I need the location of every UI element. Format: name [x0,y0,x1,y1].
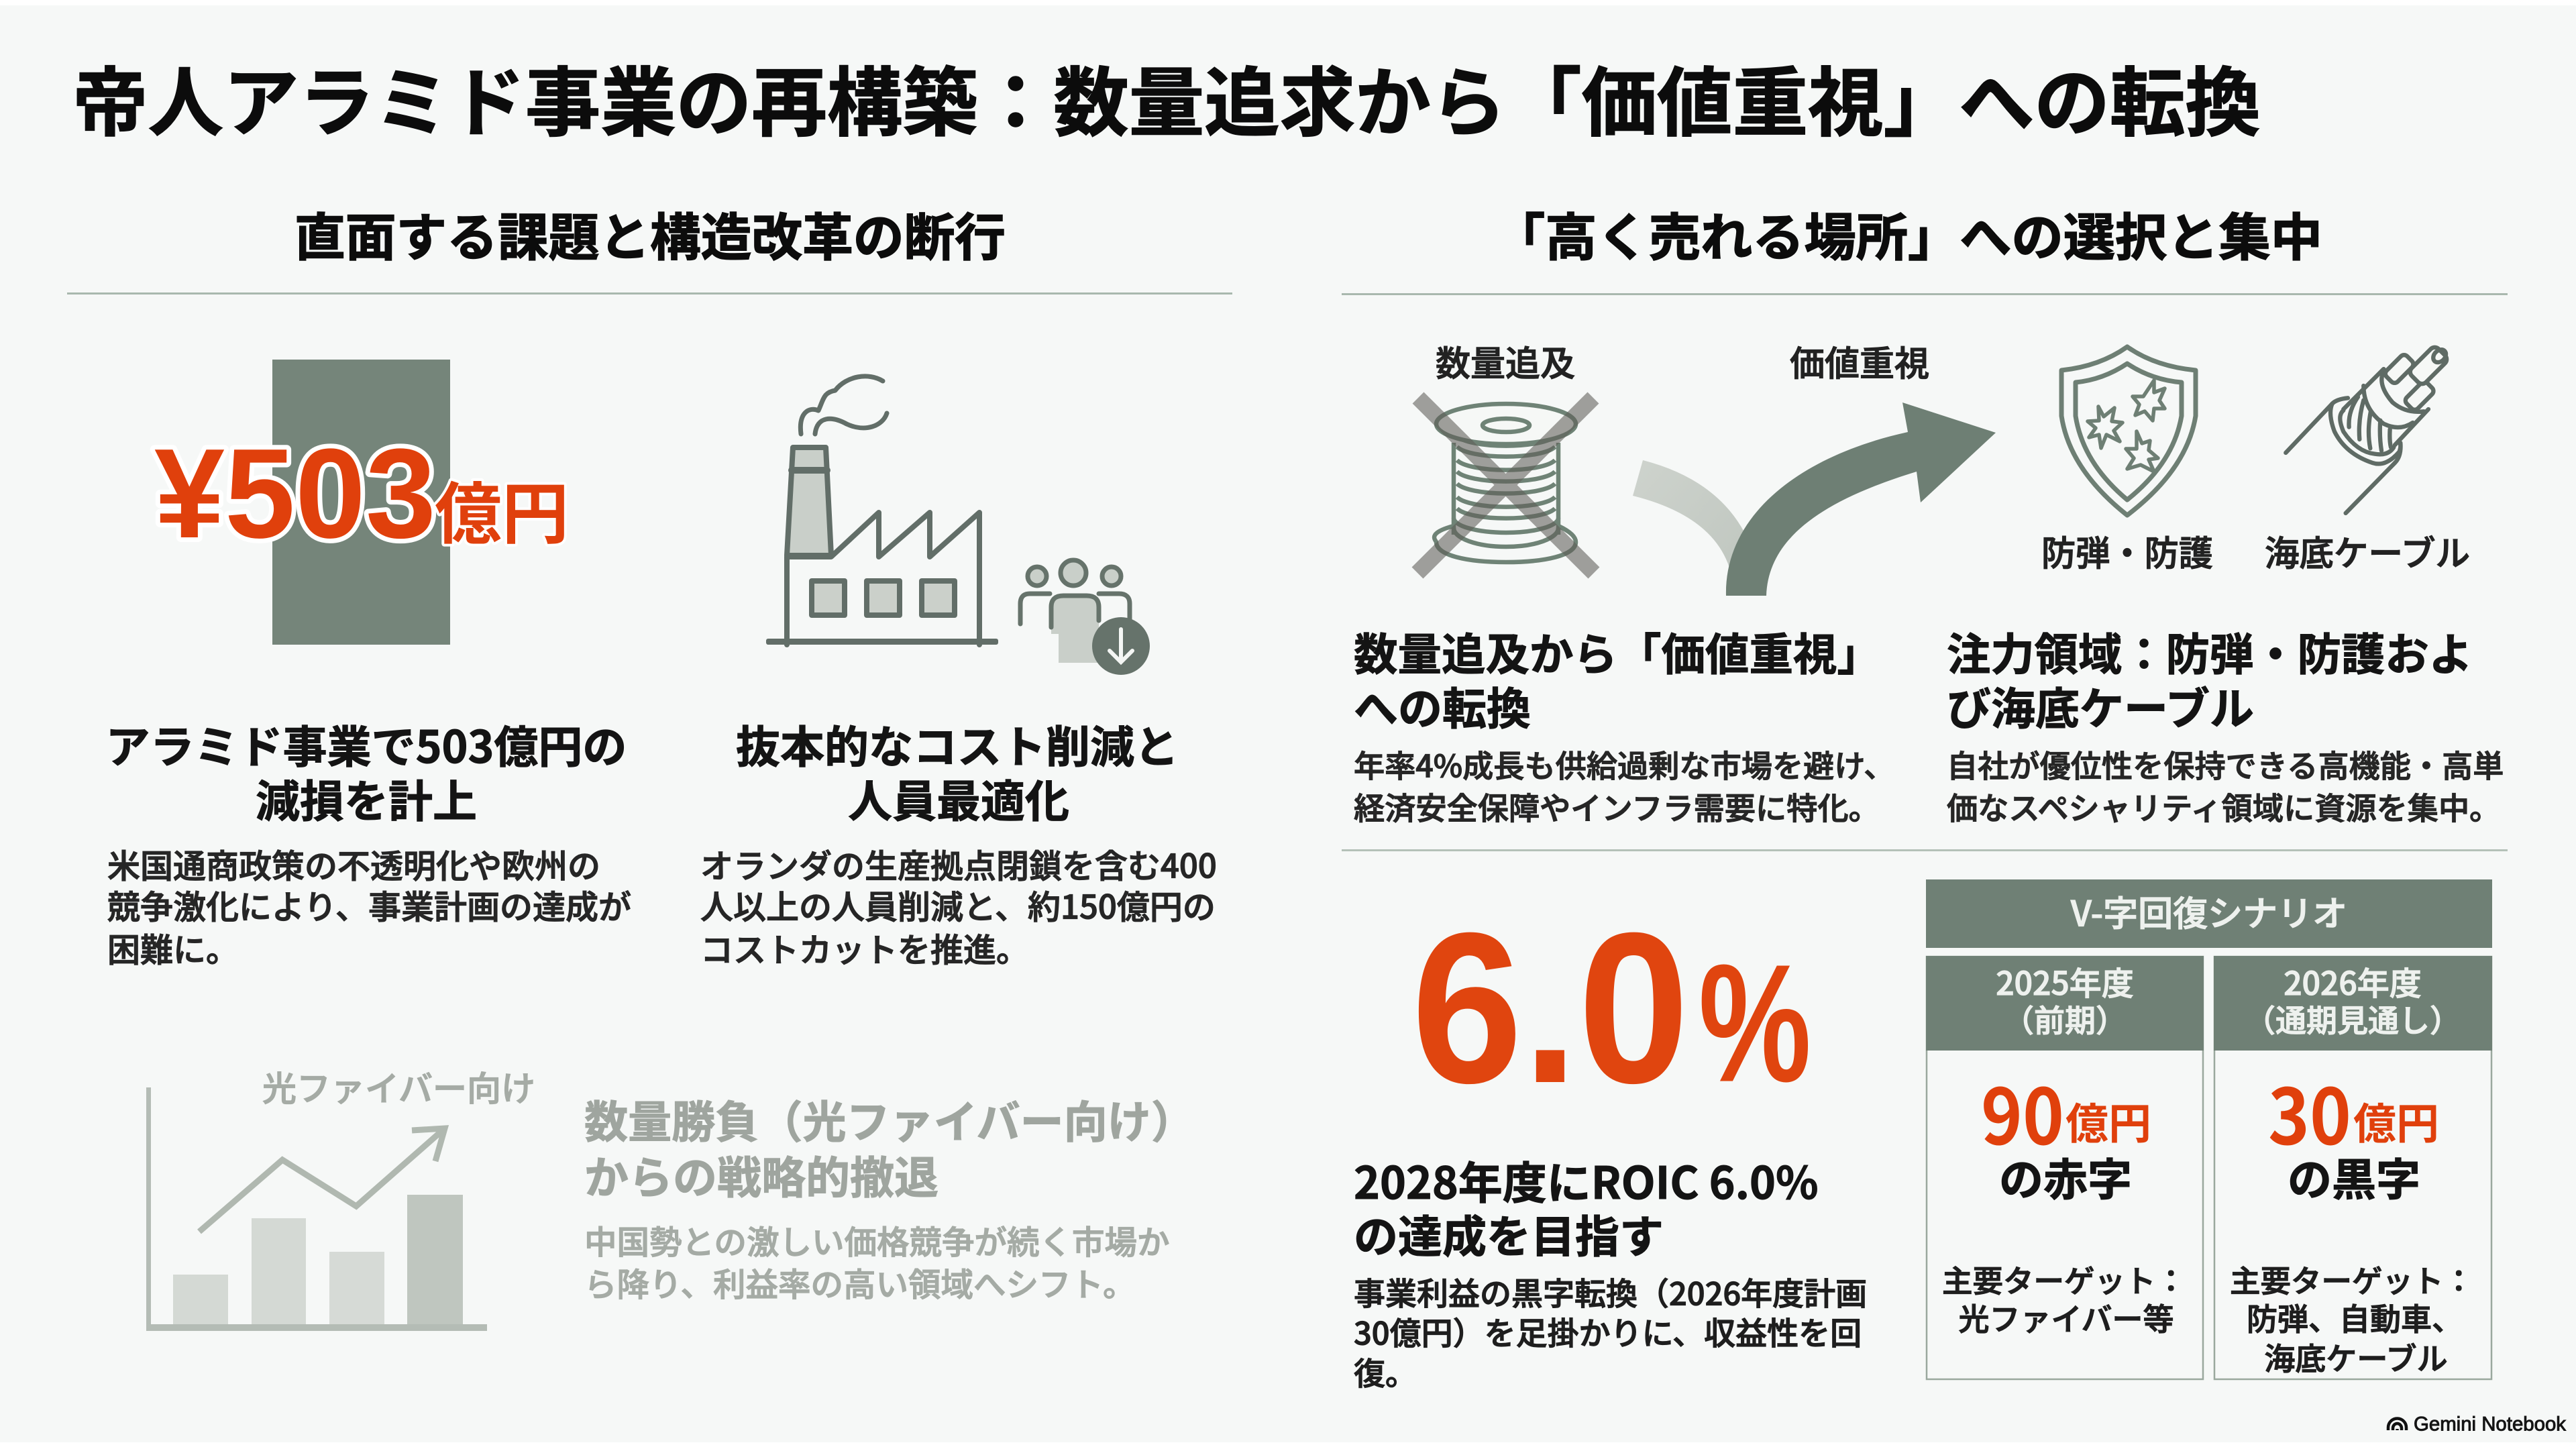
text block: focus areas [1947,619,2504,829]
logo: Gemini Notebook: Gemini Notebook [2414,1413,2567,1436]
column: fiscal 2025 [1926,956,2204,1379]
column: fiscal 2025: 億円 [2065,1090,2151,1152]
text block: impairment loss: 競争激化により、事業計画の達成が [107,881,631,928]
text block: value shift: 経済安全保障やインフラ需要に特化。 [1354,784,1880,829]
text block: focus areas: 価なスペシャリティ領域に資源を集中。 [1947,784,2500,829]
right section heading: 「高く売れる場所」への選択と集中 [1493,197,2322,270]
loss figure: 503 oku yen: ¥503 [154,423,436,565]
column: fiscal 2026: 主要ターゲット： [2230,1257,2474,1301]
text block: value shift: への転換 [1354,674,1531,738]
column: fiscal 2026: （通期見通し） [2245,997,2461,1041]
text block: cost cuts: 人員最適化 [848,766,1069,830]
text block: strategic withdrawal: 数量勝負（光ファイバー向け） [584,1087,1195,1151]
big number: ROIC 6.0%: 6.0 [1411,888,1689,1128]
arrow: faded branch [1633,460,1744,596]
chart: optical fibre bars and trend line [146,1061,535,1331]
label: value focus: 価値重視 [1790,335,1929,386]
label: ballistic protection: 防弾・防護 [2041,526,2213,576]
text block: cost cuts: 人以上の人員削減と、約150億円の [700,881,1216,928]
column: fiscal 2025: 主要ターゲット： [1942,1257,2186,1301]
text block: value shift [1354,619,1894,829]
icon: factory [766,376,998,645]
left section heading: 直面する課題と構造改革の断行 [294,197,1006,270]
icon: crossed-out spool [1417,398,1594,573]
column: fiscal 2026: 30 [2268,1056,2351,1167]
panel: right, selection and focus [1342,197,2508,1394]
text block: cost cuts: 抜本的なコスト削減と [736,712,1179,776]
text block: strategic withdrawal: 中国勢との激しい価格競争が続く市場か [584,1216,1170,1263]
table title: V-字回復シナリオ [2070,885,2347,936]
column: fiscal 2025: （前期） [2003,997,2127,1041]
text block: cost cuts: コストカットを推進。 [700,924,1029,971]
column: fiscal 2026: 防弾、自動車、 [2247,1295,2463,1340]
text block: ROIC target: の達成を目指す [1354,1201,1664,1266]
text block: ROIC target: 事業利益の黒字転換（2026年度計画 [1354,1268,1867,1315]
text block: focus areas: び海底ケーブル [1947,674,2254,738]
text block: cost cuts [700,712,1217,971]
table: V-shaped recovery scenario [1926,879,2492,1379]
title: 帝人アラミド事業の再構築：数量追求から「価値重視」への転換 [72,43,2261,152]
text block: value shift: 年率4%成長も供給過剰な市場を避け、 [1354,742,1894,786]
text block: value shift: 数量追及から「価値重視」 [1354,619,1881,684]
loss figure: 503 oku yen: 億円 [435,460,569,557]
text block: strategic withdrawal [584,1087,1195,1305]
column: fiscal 2026: 億円 [2353,1090,2439,1152]
text block: strategic withdrawal: からの戦略的撤退 [584,1142,938,1207]
text block: focus areas: 自社が優位性を保持できる高機能・高単 [1947,742,2504,786]
icon: shield [2061,347,2196,515]
text block: strategic withdrawal: ら降り、利益率の高い領域へシフト。 [584,1258,1136,1305]
text block: impairment loss: アラミド事業で503億円の [106,712,627,776]
chart: optical fibre bars and trend line: 光ファイバー向け [262,1061,535,1111]
table title [1926,879,2492,948]
column: fiscal 2026 [2214,956,2492,1379]
arrow: value shift [1726,402,1996,596]
column: fiscal 2026: の黒字 [2288,1144,2420,1209]
text block: ROIC target: 30億円）を足掛かりに、収益性を回 [1354,1308,1862,1354]
icon: people with down arrow [1020,560,1150,675]
column: fiscal 2025: の赤字 [1999,1144,2132,1209]
text block: impairment loss: 米国通商政策の不透明化や欧州の [107,840,600,888]
text block: ROIC target: 復。 [1354,1348,1417,1394]
column: fiscal 2026: 海底ケーブル [2264,1335,2448,1379]
text block: ROIC target [1354,1148,1867,1394]
loss figure: 503 oku yen [154,360,569,645]
label: submarine cable: 海底ケーブル [2265,526,2470,576]
text block: impairment loss [106,712,631,971]
column: fiscal 2025: 光ファイバー等 [1958,1295,2174,1340]
text block: impairment loss: 減損を計上 [256,766,477,830]
column: fiscal 2025: 2025年度 [1996,957,2134,1004]
text block: ROIC target: 2028年度にROIC 6.0% [1354,1148,1819,1212]
column: fiscal 2025: 90 [1981,1056,2064,1167]
panel: left, challenges and restructuring [67,197,1232,1331]
big number: ROIC 6.0%: % [1699,930,1811,1116]
icon: submarine cable [2286,345,2449,513]
text block: focus areas: 注力領域：防弾・防護およ [1947,619,2473,684]
text block: impairment loss: 困難に。 [107,924,239,971]
label: volume pursuit: 数量追及 [1436,335,1575,386]
column: fiscal 2026: 2026年度 [2284,957,2422,1004]
text block: cost cuts: オランダの生産拠点閉鎖を含む400 [700,840,1217,888]
